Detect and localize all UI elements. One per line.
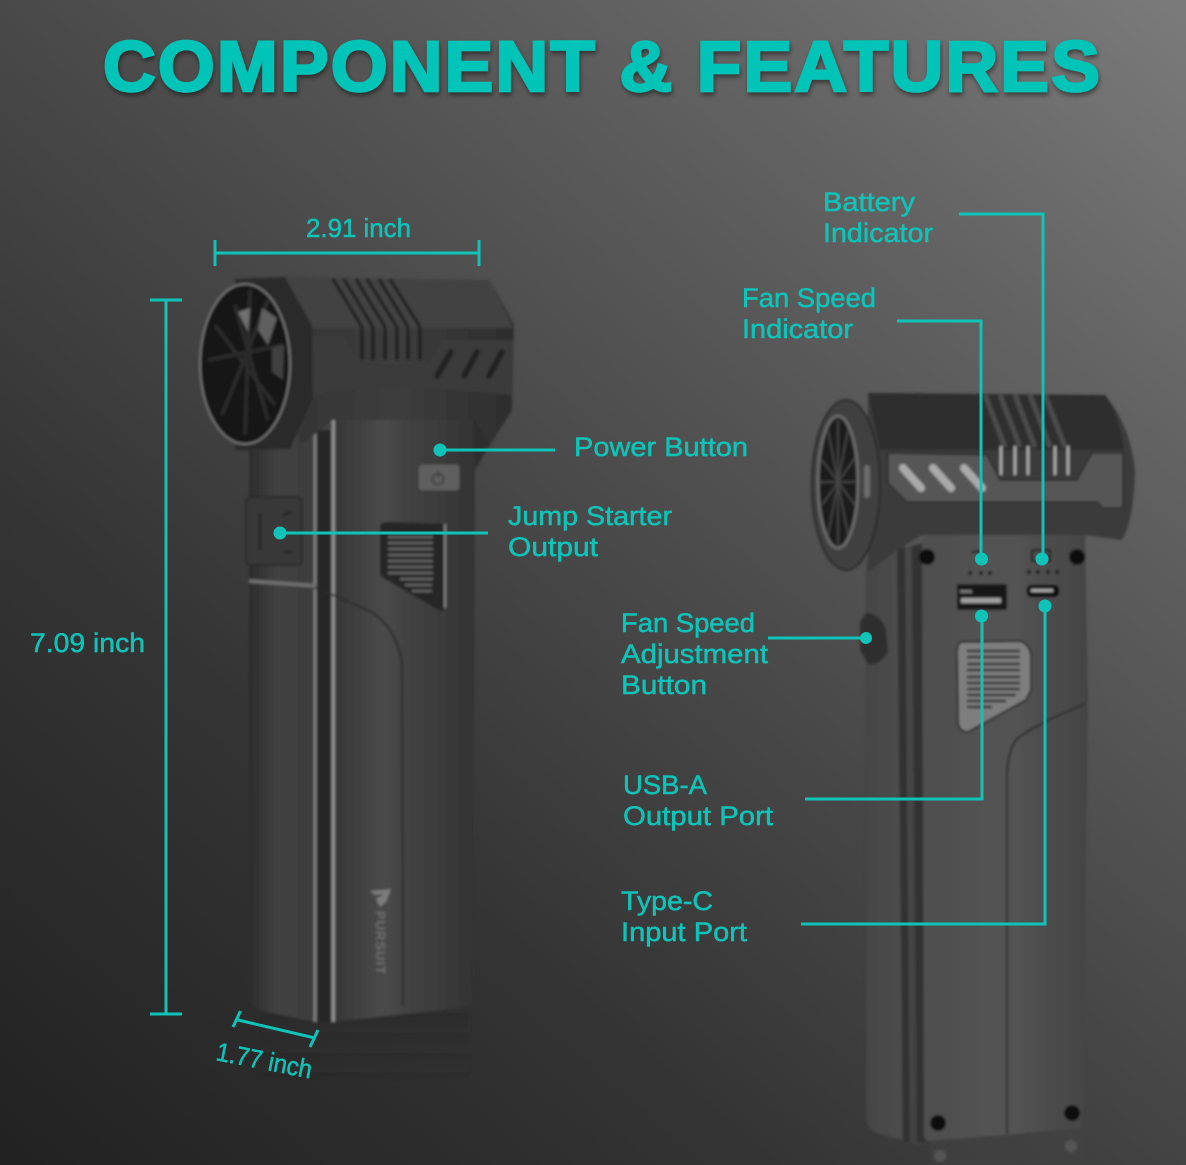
screw holes [919, 549, 1085, 1131]
dimension: depth [214, 1011, 318, 1084]
Type-C port [1026, 584, 1060, 598]
grip vent [957, 641, 1031, 732]
label: fan speed adjustment button: Fan Speed [621, 608, 755, 638]
label: USB-A output port [623, 610, 988, 831]
label: type-C input port [621, 600, 1052, 947]
label: power button: Power Button [574, 432, 748, 462]
top vent slats [333, 279, 420, 360]
label: fan speed adjustment button: Adjustment [621, 639, 769, 669]
USB-A port [957, 584, 1007, 610]
head body [868, 393, 1135, 572]
band slashes [903, 468, 982, 488]
label: jump starter output [274, 501, 672, 562]
dimension: height [30, 300, 182, 1014]
label: jump starter output: Jump Starter [508, 501, 672, 531]
band vents [362, 336, 420, 360]
handle side [249, 430, 332, 1022]
label: battery indicator: Battery [823, 187, 916, 217]
panel centre seam [1007, 704, 1085, 1134]
fan rim [200, 284, 290, 444]
label: fan speed adjustment button: Button [621, 670, 707, 700]
dimension: depth: 1.77 inch [214, 1036, 315, 1084]
label: power button [434, 432, 748, 462]
faint reflection below left device [262, 1012, 470, 1082]
jump starter port [246, 497, 302, 565]
side band [312, 336, 514, 398]
fan rim [812, 400, 880, 570]
label: fan speed adjustment button [621, 608, 872, 700]
dark side groove [897, 545, 926, 1142]
lower reflected screws [934, 1140, 1077, 1162]
label: fan speed indicator: Indicator [742, 314, 853, 344]
handle seam [249, 582, 403, 1006]
side slashes [437, 352, 502, 376]
grip vent [380, 522, 446, 611]
label: battery indicator [823, 187, 1048, 566]
label: battery indicator: Indicator [823, 218, 933, 248]
dimension: width [215, 213, 479, 266]
label: type-C input port: Input Port [621, 917, 748, 947]
seam highlight [249, 581, 316, 586]
dark groove and highlights [314, 420, 335, 1022]
fan blades [208, 290, 283, 435]
head top dark panel [868, 393, 1124, 450]
label: USB-A output port: Output Port [623, 801, 774, 831]
left device: front view [200, 277, 514, 1082]
label: USB-A output port: USB-A [623, 770, 707, 800]
fan housing [235, 277, 313, 450]
handle side [866, 540, 930, 1145]
handle front [333, 420, 475, 1022]
top vent slats [985, 395, 1065, 447]
label: type-C input port: Type-C [621, 886, 713, 916]
indicator icons [972, 550, 1050, 561]
rim indicator [864, 465, 870, 498]
title: COMPONENT & FEATURES [103, 28, 1102, 107]
dimension: width: 2.91 inch [306, 213, 411, 243]
brand logo [370, 889, 391, 975]
label: fan speed indicator: Fan Speed [742, 283, 876, 313]
blade highlights [238, 308, 284, 380]
side band [888, 453, 1123, 508]
fan blades [819, 420, 857, 545]
right device: back view [812, 393, 1135, 1165]
indicator dots [968, 570, 1059, 575]
back panel [922, 535, 1088, 1141]
dimension: height: 7.09 inch [30, 628, 145, 658]
fan inner ring [818, 416, 858, 548]
label: fan speed indicator [742, 283, 988, 566]
band vents [1001, 446, 1068, 475]
head top facet [285, 277, 513, 328]
power button [418, 464, 460, 491]
head upper panel [285, 277, 514, 445]
fan speed adjustment button [860, 613, 888, 664]
rear handle shoulder [473, 420, 505, 470]
label: jump starter output: Output [508, 532, 599, 562]
brand logo: PURSUIT [373, 911, 388, 975]
reflection below right device [930, 1130, 1083, 1165]
